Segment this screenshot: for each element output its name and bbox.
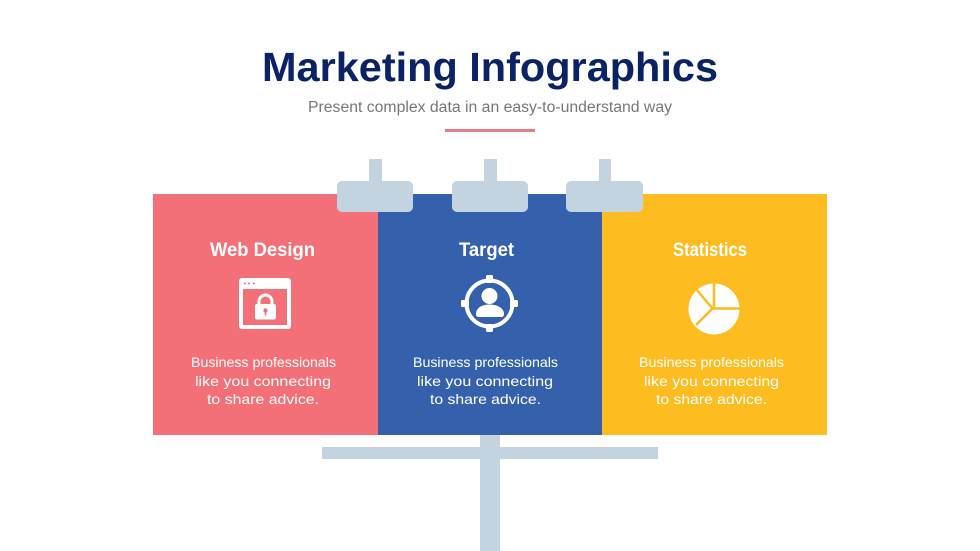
- panel: target: to share advice.: [430, 391, 541, 407]
- title underline: [445, 129, 535, 132]
- heading: statistics: Statistics: [673, 239, 747, 261]
- panel: web design: to share advice.: [207, 391, 319, 407]
- body text: target: Business professionals: [413, 354, 558, 370]
- billboard clamp left: [337, 159, 413, 212]
- body text: web design: Business professionals: [191, 354, 336, 370]
- panel: target: [378, 194, 602, 435]
- subtitle: Present complex data in an easy-to-understand way: [308, 99, 672, 116]
- panel: statistics: [602, 194, 827, 435]
- panel: target: like you connecting: [417, 373, 553, 389]
- panel: statistics: to share advice.: [656, 391, 767, 407]
- heading: target: Target: [459, 239, 514, 261]
- panel: web design: [153, 194, 378, 435]
- body text: statistics: Business professionals: [639, 354, 784, 370]
- icon: target with person: [461, 275, 518, 332]
- billboard clamp centre: [452, 159, 528, 212]
- panel: statistics: like you connecting: [644, 373, 779, 389]
- billboard clamp right: [566, 159, 643, 212]
- panel: web design: like you connecting: [195, 373, 331, 389]
- title: Marketing Infographics: [262, 44, 718, 90]
- icon: browser with padlock: [239, 278, 291, 329]
- icon: pie chart: [688, 282, 741, 334]
- billboard pole and crossbar: [322, 435, 658, 551]
- heading: web design: Web Design: [210, 239, 315, 261]
